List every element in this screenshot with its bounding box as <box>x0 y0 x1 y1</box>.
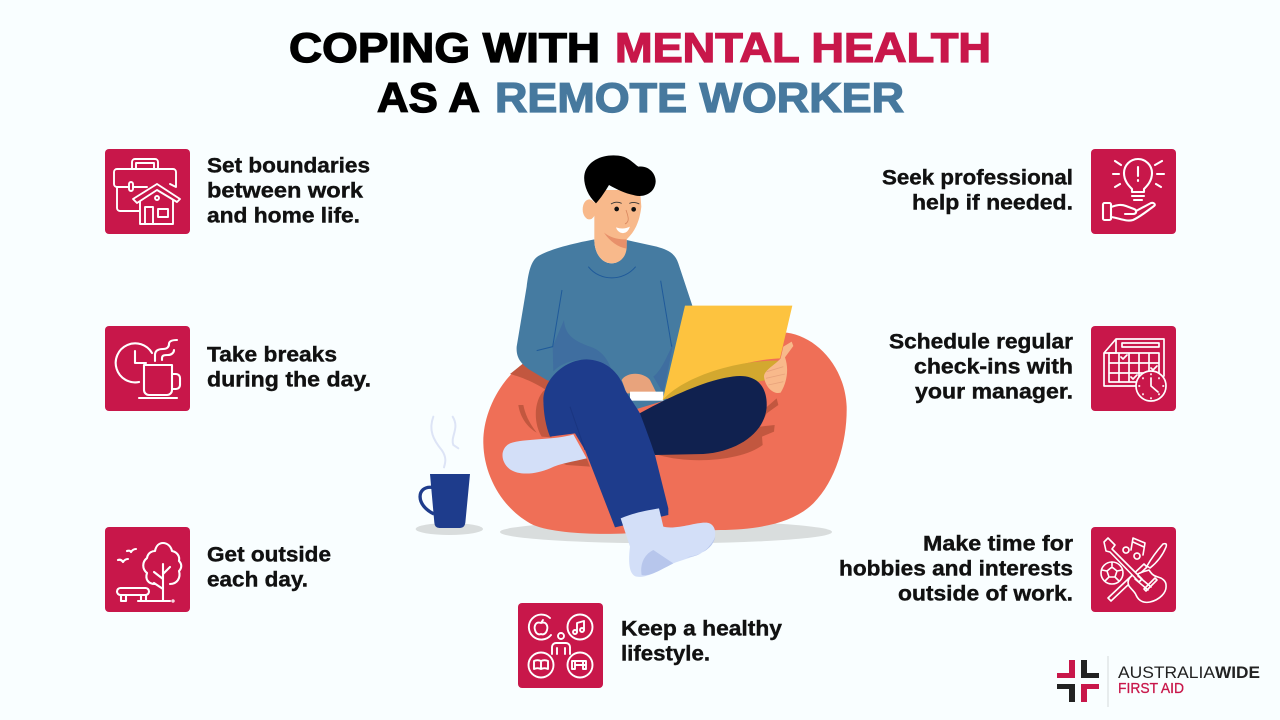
text: schedule regular check-ins: check-ins with <box>914 356 1073 378</box>
logo: Australia Wide First Aid: FIRST AID <box>1118 680 1184 697</box>
logo: Australia Wide First Aid: WIDE <box>1215 663 1260 682</box>
text: take breaks: Take breaks <box>207 344 337 366</box>
text: make time for hobbies: Make time for <box>923 532 1073 556</box>
text: schedule regular check-ins: your manager. <box>915 380 1073 404</box>
title: COPING WITH <box>289 24 600 71</box>
icon: clock and coffee mug <box>105 326 190 411</box>
icon: light bulb over hand <box>1091 149 1176 234</box>
text: keep a healthy lifestyle: lifestyle. <box>621 642 710 666</box>
crossed legs and socks <box>502 359 767 577</box>
text: make time for hobbies: outside of work. <box>898 582 1073 606</box>
beanbag <box>483 333 847 534</box>
text: take breaks <box>207 344 371 392</box>
logo: Australia Wide First Aid: AUSTRALIA <box>1118 663 1216 682</box>
title: REMOTE WORKER <box>495 74 904 121</box>
head and neck <box>583 155 656 263</box>
hand and laptop <box>622 306 793 401</box>
text: schedule regular check-ins: Schedule regular <box>889 330 1073 354</box>
text: schedule regular check-ins <box>889 330 1073 404</box>
title: MENTAL HEALTH <box>615 24 991 71</box>
text: seek professional help: help if needed. <box>912 192 1073 214</box>
icon: calendar and clock <box>1091 326 1176 411</box>
text: get outside <box>207 544 331 592</box>
floor shadows <box>416 521 832 543</box>
text: make time for hobbies: hobbies and interests <box>839 558 1073 580</box>
logo: Australia Wide First Aid <box>1057 656 1260 707</box>
illustration: person on beanbag with coffee <box>416 155 847 577</box>
title: AS A <box>377 74 480 121</box>
text: set boundaries: and home life. <box>207 204 360 228</box>
text: take breaks: during the day. <box>207 368 371 392</box>
text: set boundaries: Set boundaries <box>207 154 370 178</box>
icon: healthy lifestyle <box>518 603 603 688</box>
text: seek professional help <box>882 166 1073 214</box>
icon: guitar, ball, music note and brush <box>1091 527 1176 612</box>
text: set boundaries: between work <box>207 180 363 202</box>
text: seek professional help: Seek professional <box>882 166 1073 190</box>
title <box>289 24 991 121</box>
icon: briefcase and house <box>105 149 190 234</box>
coffee mug with steam <box>420 417 470 528</box>
text: make time for hobbies <box>839 532 1073 606</box>
text: keep a healthy lifestyle: Keep a healthy <box>621 618 782 640</box>
text: get outside: each day. <box>207 568 308 592</box>
text: get outside: Get outside <box>207 544 331 566</box>
text: keep a healthy lifestyle <box>621 618 782 666</box>
text: set boundaries <box>207 154 370 228</box>
icon: tree, bench and birds <box>105 527 190 612</box>
sweater <box>517 239 693 410</box>
